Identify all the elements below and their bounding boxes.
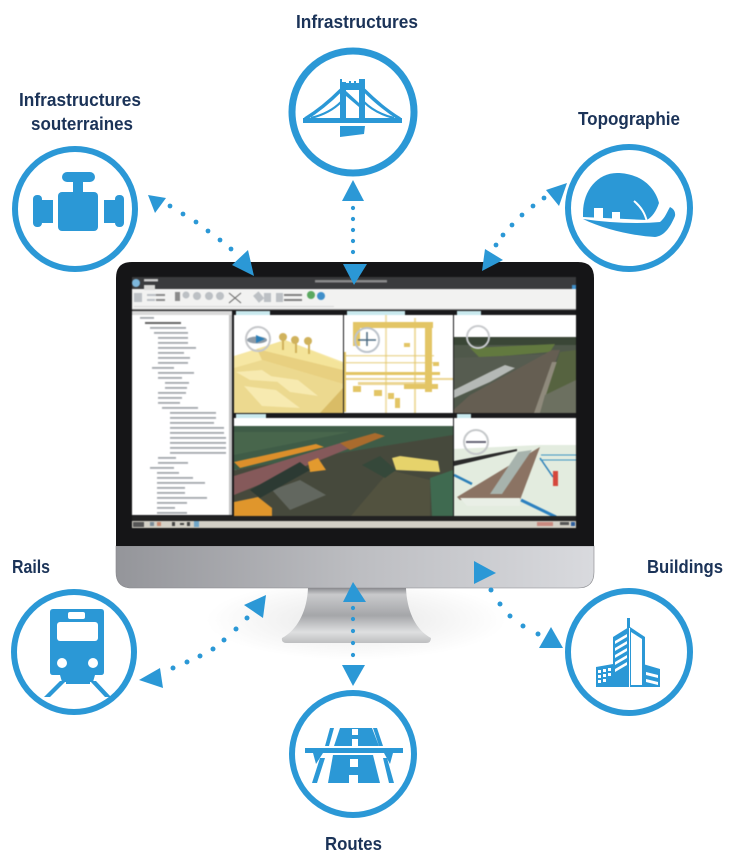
double arrow: left icon to monitor bbox=[148, 195, 254, 276]
heading: Routes: Routes bbox=[325, 834, 382, 854]
project tree panel bbox=[132, 310, 234, 522]
viewport: pipe network model bbox=[344, 315, 453, 413]
heading: Buildings: Buildings bbox=[647, 557, 723, 577]
double arrow: rails icon to monitor bbox=[139, 595, 266, 688]
heading: Infrastructures souterraines bbox=[19, 90, 141, 134]
title bar bbox=[132, 277, 576, 289]
viewport: city overview aerial photo bbox=[234, 418, 453, 517]
icon: valve bbox=[15, 149, 135, 269]
ribbon toolbar bbox=[132, 285, 576, 310]
heading: Infrastructures souterraines: Infrastructures bbox=[19, 90, 141, 110]
monitor bezel bbox=[116, 262, 594, 546]
heading: Topographie: Topographie bbox=[578, 109, 680, 129]
monitor stand bbox=[282, 588, 431, 643]
viewport background bbox=[232, 310, 576, 522]
heading: Infrastructures souterraines: souterraines bbox=[31, 114, 133, 134]
application screen bbox=[132, 277, 576, 528]
taskbar bbox=[132, 521, 576, 528]
double arrow: buildings icon to monitor bbox=[474, 561, 563, 648]
heading: Infrastructures: Infrastructures bbox=[296, 12, 418, 32]
icon: highway bbox=[292, 693, 414, 815]
viewport: yellow building model bbox=[234, 315, 343, 413]
computer monitor bbox=[116, 262, 594, 643]
icon: train bbox=[14, 592, 134, 712]
viewport tabs bbox=[236, 311, 481, 418]
icon: buildings bbox=[568, 591, 690, 713]
monitor chin bbox=[116, 546, 594, 588]
double arrow: right icon to monitor bbox=[482, 183, 567, 271]
icon: bridge bbox=[292, 51, 414, 173]
stand shadow bbox=[206, 580, 506, 660]
viewport: railway aerial photo bbox=[450, 315, 576, 413]
status bar bbox=[132, 516, 576, 521]
double arrow: top icon to monitor bbox=[342, 180, 367, 285]
heading: Rails: Rails bbox=[12, 557, 50, 577]
viewport: track model bbox=[454, 418, 576, 517]
icon: helmet bbox=[568, 147, 690, 269]
double arrow: routes icon to monitor bbox=[342, 582, 366, 686]
